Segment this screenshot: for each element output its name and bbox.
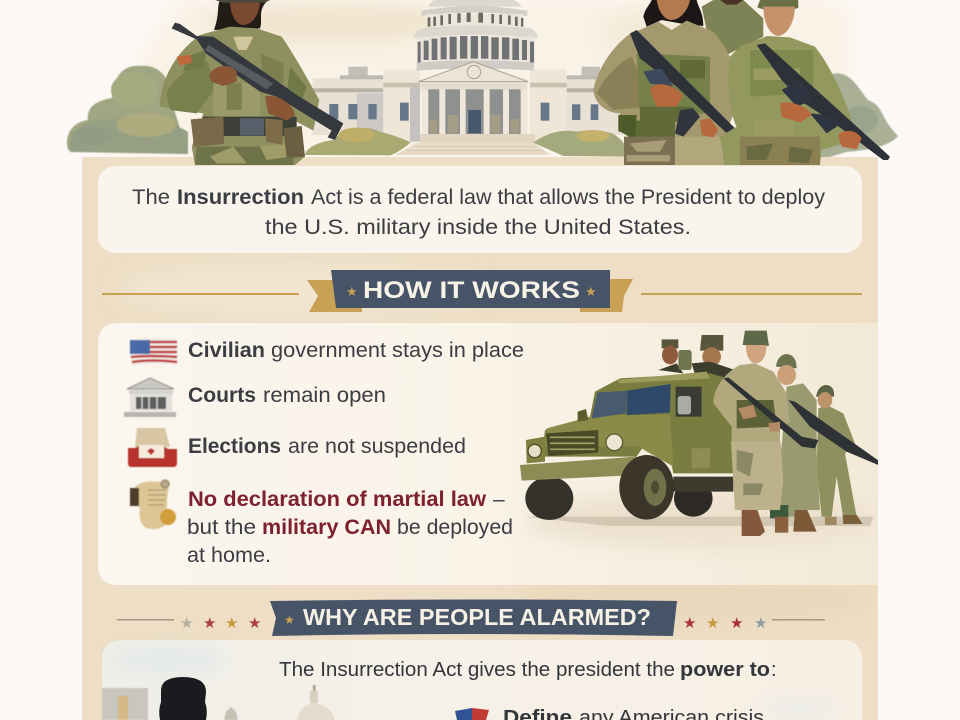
- label: martial law warning: [187, 488, 513, 567]
- illustration: distant buildings: [102, 688, 238, 720]
- back soldier: [702, 0, 763, 55]
- lead sentence: :: [771, 659, 777, 681]
- illustration: soft ground under truck: [525, 492, 875, 548]
- bush left: [305, 128, 411, 155]
- right page margin: [878, 160, 960, 720]
- back soldiers: [662, 335, 723, 351]
- intro text: Act is a federal law that allows the President to deploy: [311, 185, 825, 209]
- intro text card: [98, 166, 862, 253]
- rifles: [723, 377, 818, 448]
- paper panel: [82, 157, 880, 720]
- icon: US flag: [130, 338, 177, 366]
- front soldier: [743, 331, 769, 346]
- steps: [420, 134, 535, 143]
- label: courts: remain open: [263, 384, 386, 407]
- illustration: trees right: [820, 73, 898, 160]
- label: courts: Courts: [188, 384, 256, 407]
- intro text: the U.S. military inside the United States.: [265, 215, 691, 239]
- label: martial law warning: No declaration of martial law: [188, 488, 487, 511]
- portico: [418, 62, 528, 82]
- icon: courthouse: [124, 378, 176, 417]
- label: martial law warning: –: [493, 488, 505, 511]
- stars right: ★: [706, 615, 719, 632]
- wings: [313, 78, 383, 135]
- heading: WHY ARE PEOPLE ALARMED?: [303, 604, 651, 630]
- pavilions: [383, 69, 420, 141]
- intro text: [132, 185, 825, 239]
- windows: [329, 103, 598, 121]
- stars right: [683, 615, 767, 632]
- label: martial law warning: but the: [187, 516, 256, 539]
- dome: [428, 0, 522, 7]
- illustration: trees left: [67, 66, 188, 154]
- banner: why are people alarmed: [270, 600, 677, 636]
- banner: how it works: [307, 270, 633, 312]
- illustration: sky wash behind Capitol: [100, 0, 850, 155]
- front wheel: [619, 455, 674, 520]
- illustration: right soldiers group: [593, 0, 890, 165]
- stars left: ★: [248, 615, 261, 632]
- stars left: [180, 615, 261, 632]
- star: ★: [284, 613, 295, 627]
- label: elections: [188, 435, 466, 458]
- illustration: truck and soldiers: [520, 331, 880, 536]
- stars left: ★: [203, 615, 216, 632]
- front right soldier: [757, 0, 798, 9]
- rear and far-left wheels: [525, 477, 573, 520]
- stars left: ★: [180, 615, 193, 632]
- stars right: ★: [754, 615, 767, 632]
- label: martial law warning: be deployed: [397, 516, 513, 539]
- illustration: US Capitol building: [305, 0, 627, 157]
- lead sentence: power to: [680, 659, 770, 681]
- label: civilian: government stays in place: [271, 339, 524, 362]
- third soldier: [817, 405, 857, 518]
- label: civilian: Civilian: [188, 339, 265, 362]
- ground shadow: [523, 517, 873, 526]
- illustration: silhouette of president: [159, 677, 207, 720]
- label: courts: [188, 384, 386, 407]
- star: ★: [585, 284, 597, 299]
- divider: alarmed section: [117, 619, 825, 620]
- stars right: ★: [730, 615, 743, 632]
- woman soldier: [643, 0, 703, 27]
- icon: scroll: [130, 480, 176, 529]
- label: elections: are not suspended: [288, 435, 466, 458]
- icon: flag shield: [455, 708, 489, 720]
- label: elections: Elections: [188, 435, 281, 458]
- star: ★: [346, 284, 358, 299]
- intro text: The: [132, 185, 170, 209]
- stars right: ★: [683, 615, 696, 632]
- bullet text: [503, 707, 764, 720]
- sky tints: [115, 650, 840, 717]
- label: martial law warning: military CAN: [262, 516, 391, 539]
- icon: ballot box: [128, 428, 177, 467]
- lead sentence: The Insurrection Act gives the president the: [279, 659, 675, 681]
- second soldier: [770, 383, 820, 517]
- intro text: Insurrection: [177, 185, 304, 209]
- label: martial law warning: at home.: [187, 544, 271, 567]
- heading: HOW IT WORKS: [363, 277, 580, 304]
- bush right: [533, 130, 627, 157]
- illustration: capitol dome: [297, 685, 335, 720]
- panel: how it works: [98, 323, 880, 585]
- truck body: [542, 373, 733, 473]
- illustration: left soldier: [160, 0, 343, 165]
- divider lines: how it works: [102, 293, 862, 295]
- stars left: ★: [225, 615, 238, 632]
- panel: power of the president: [102, 640, 862, 720]
